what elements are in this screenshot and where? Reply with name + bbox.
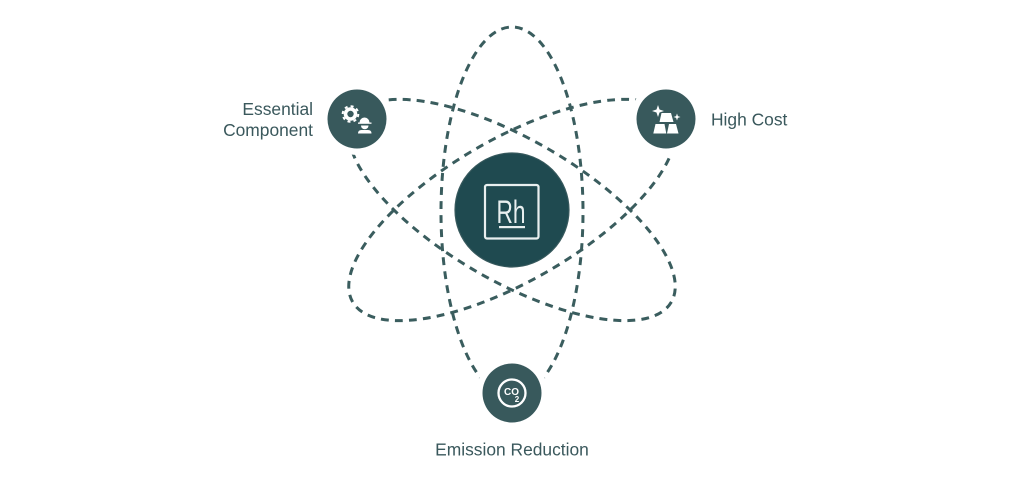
orbit: ellipse tilted toward top left	[317, 57, 707, 363]
icon: CO2 ring	[498, 380, 526, 406]
label: essential component: Component	[223, 120, 313, 140]
orbit: vertical ellipse	[441, 27, 583, 397]
icon: element tile	[485, 185, 538, 238]
central rhodium node	[448, 146, 576, 274]
icon: CO2 ring: 2	[515, 395, 520, 404]
node: essential component	[321, 83, 393, 155]
element underline	[499, 226, 525, 228]
icon: CO2 ring: CO	[504, 386, 519, 398]
element symbol: Rh	[496, 194, 526, 230]
icon: gear and worker	[343, 106, 372, 134]
label: essential component: Essential	[242, 99, 313, 119]
label: high cost: High Cost	[711, 110, 788, 130]
label: essential component	[223, 99, 313, 140]
node: emission reduction	[476, 357, 548, 429]
orbit: ellipse tilted toward top right	[317, 57, 707, 363]
node: high cost	[630, 83, 702, 155]
label: emission reduction: Emission Reduction	[435, 440, 589, 460]
icon: gold bars and sparkles	[652, 105, 680, 134]
